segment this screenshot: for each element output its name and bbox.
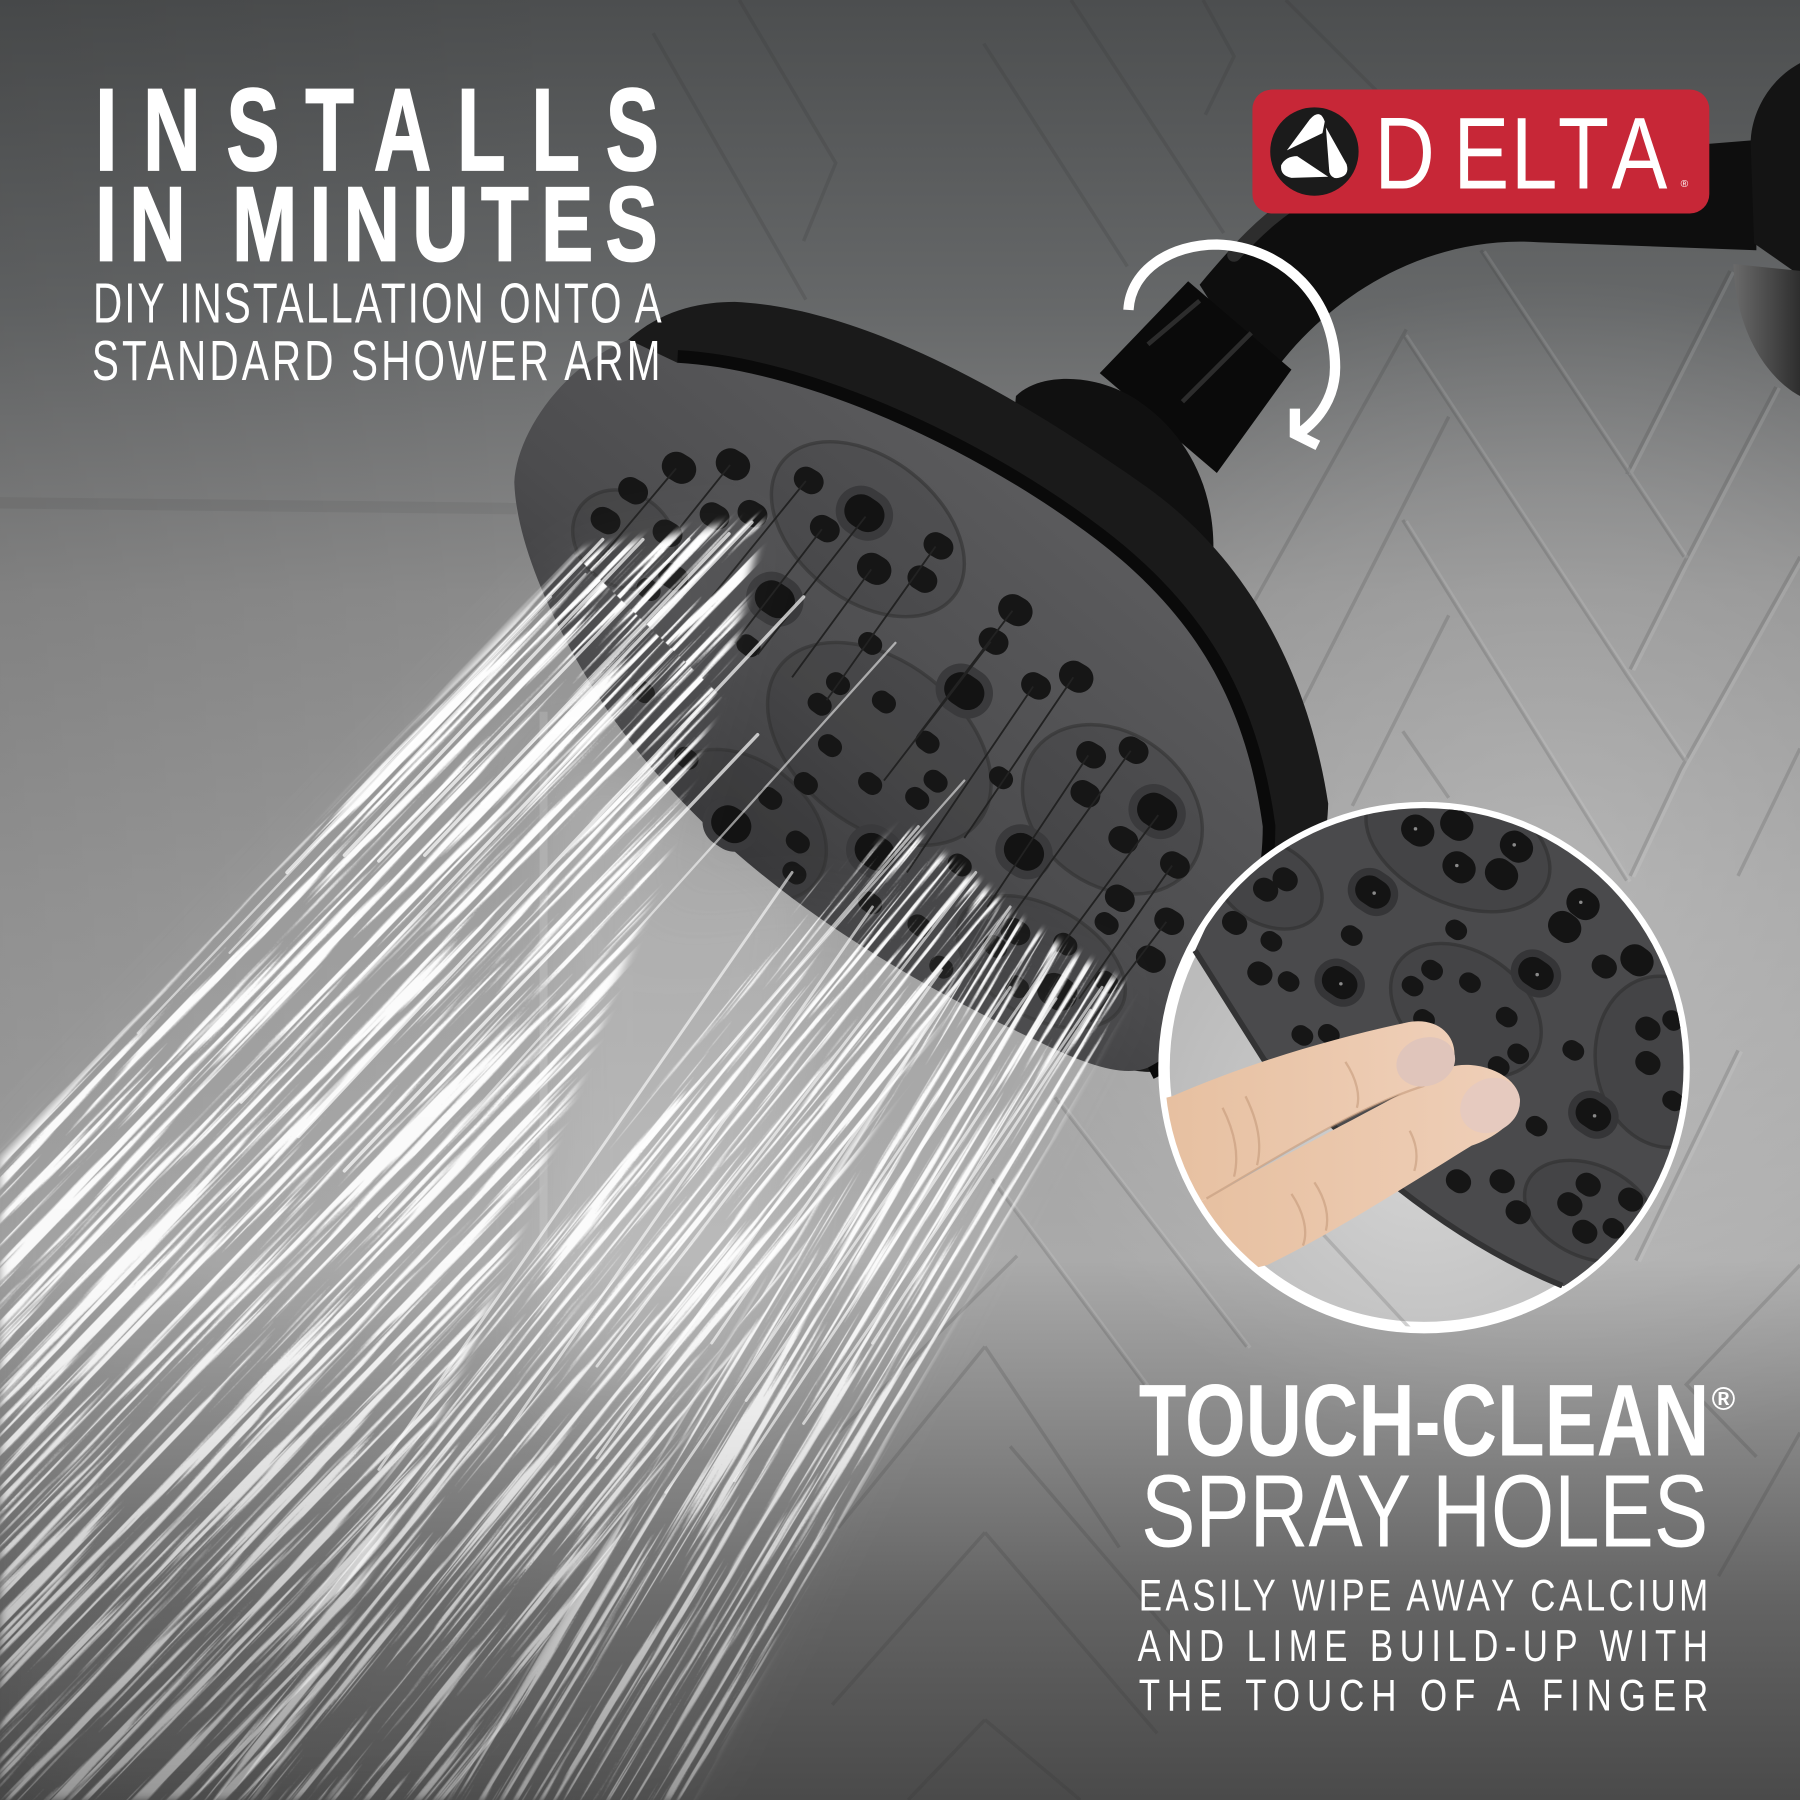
shower head: black rim xyxy=(626,302,1328,1072)
middle jet streaks xyxy=(194,825,1015,1800)
background: herringbone tile lines xyxy=(653,0,1800,1800)
fingernail upper xyxy=(1396,1037,1456,1087)
shower head: spray face xyxy=(514,340,1263,1071)
logo registered mark: ® xyxy=(1681,179,1689,190)
text: calcium and lime description xyxy=(1138,1570,1708,1720)
shower arm xyxy=(1200,63,1800,396)
text: calcium and lime description: EASILY WIPE AWAY CALCIUM xyxy=(1139,1570,1708,1621)
spray haze xyxy=(0,517,1125,1800)
registered mark: ® xyxy=(1712,1381,1736,1417)
arm highlight xyxy=(1234,193,1309,255)
logo wordmark: DELTA xyxy=(1374,95,1668,210)
inset spray plate xyxy=(1195,808,1684,1286)
finger creases xyxy=(1206,1061,1424,1246)
thin jets leaving nozzles xyxy=(597,465,1172,1022)
shower head: connector and collar xyxy=(1010,281,1291,574)
individual streams from nozzles xyxy=(138,522,1102,1492)
text: DIY installation xyxy=(92,273,662,393)
spray holes xyxy=(603,463,1178,994)
right jet streaks xyxy=(447,902,1128,1800)
icon: rotation arrow xyxy=(1128,245,1335,445)
text: DIY installation: DIY INSTALLATION ONTO A xyxy=(93,273,662,335)
inset depressions xyxy=(1225,814,1672,1262)
heading: installs in minutes: INSTALLS xyxy=(95,65,659,196)
heading: installs in minutes xyxy=(95,65,659,283)
flange lower ring xyxy=(1733,264,1800,396)
inset fingers xyxy=(1166,1021,1520,1268)
text: calcium and lime description: THE TOUCH OF A FINGER xyxy=(1139,1670,1708,1720)
wall flange xyxy=(1751,63,1800,276)
face depressions xyxy=(553,406,1236,1056)
left jet streaks xyxy=(0,510,768,1800)
text: calcium and lime description: AND LIME BUILD-UP WITH xyxy=(1138,1621,1708,1671)
inset holes xyxy=(1233,823,1675,1233)
heading: touch-clean spray holes xyxy=(1139,1364,1736,1568)
logo: Delta xyxy=(1252,90,1709,214)
fingernail lower xyxy=(1460,1078,1520,1133)
water spray xyxy=(0,510,1128,1800)
logo emblem xyxy=(1270,107,1359,196)
inset: finger wiping spray holes xyxy=(1158,802,1690,1334)
text: DIY installation: STANDARD SHOWER ARM xyxy=(92,331,660,393)
heading: installs in minutes: IN MINUTES xyxy=(95,165,658,283)
